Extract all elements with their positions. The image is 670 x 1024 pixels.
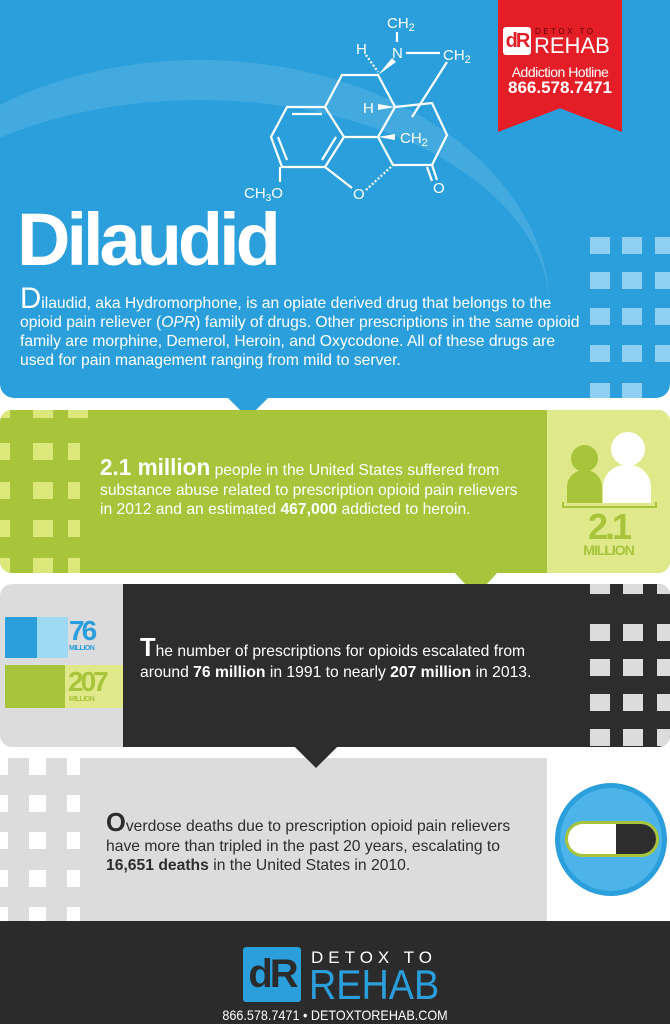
footer contact: 866.578.7471 • DETOXTOREHAB.COM [222,1007,448,1023]
badge logo: dR [506,30,528,52]
icon: people 2.1 million [547,410,670,573]
text: overdose stat: Overdose deaths due to prescription opioid pain relievers [106,807,510,837]
text: 2.1 million stat: 2.1 million people in the United States suffered from [100,454,499,480]
text: overdose stat [106,807,510,874]
chart: 76 vs 207 million: 207 [68,666,106,697]
molecule diagram: 2 [465,54,471,66]
intro text: Dilaudid, aka Hydromorphone, is an opiate derived drug that belongs to the [20,282,551,315]
chart: 76 vs 207 million [5,615,123,708]
intro text: used for pain management ranging from mild to server. [20,352,401,369]
footer logo: DETOX TO [311,948,437,967]
icon: people 2.1 million: MILLION [583,542,634,558]
text: overdose stat: have more than tripled in the past 20 years, escalating to [106,838,500,854]
molecule diagram [244,15,471,204]
molecule diagram: CH [387,15,409,32]
molecule diagram: H [363,100,374,117]
panel: 2.1 million (green) [0,410,670,584]
intro text: opioid pain reliever (OPR) family of drugs. Other prescriptions in the same opioid [20,314,580,331]
molecule diagram: CH [443,47,465,64]
badge logo [503,27,609,55]
title: Dilaudid [17,198,277,281]
text: prescriptions stat: The number of prescriptions for opioids escalated from [140,632,525,662]
text: 2.1 million stat: in 2012 and an estimated 467,000 addicted to heroin. [100,501,471,518]
footer logo: REHAB [309,961,439,1008]
molecule diagram: CH [244,185,266,202]
badge: hotline: 866.578.7471 [508,78,612,97]
badge logo: REHAB [534,33,610,58]
icon: people 2.1 million: 2.1 [588,506,629,547]
molecule diagram: 2 [422,137,428,149]
text: overdose stat: 16,651 deaths in the United States in 2010. [106,857,410,874]
molecule diagram: H [356,41,367,58]
footer logo [243,947,439,1008]
molecule diagram: O [433,180,445,197]
molecule diagram: 3 [266,193,272,204]
badge: hotline [498,0,622,132]
molecule diagram: O [353,186,365,203]
text: 2.1 million stat [100,454,518,518]
panel: prescriptions (dark) [0,584,670,758]
panel: overdose deaths (grey) [0,758,547,921]
footer logo: dR [248,952,296,996]
molecule diagram: O [271,185,283,202]
text: prescriptions stat [140,632,531,681]
intro text [20,282,580,369]
badge logo: DETOX TO [535,27,595,36]
molecule diagram: CH [400,130,422,147]
molecule diagram: N [392,45,403,62]
icon: pill in circle [555,783,667,896]
text: 2.1 million stat: substance abuse related to prescription opioid pain relievers [100,482,518,498]
chart: 76 vs 207 million: MILLION [69,696,94,703]
chart: 76 vs 207 million: MILLION [69,645,94,652]
badge: hotline: Addiction Hotline [512,64,608,80]
text: prescriptions stat: around 76 million in 1991 to nearly 207 million in 2013. [140,664,531,681]
intro text: family are morphine, Demerol, Heroin, and Oxycodone. All of these drugs are [20,333,555,350]
panel: intro (blue) [0,0,670,410]
footer [0,921,670,1024]
molecule diagram: 2 [409,22,415,34]
chart: 76 vs 207 million: 76 [69,615,94,646]
